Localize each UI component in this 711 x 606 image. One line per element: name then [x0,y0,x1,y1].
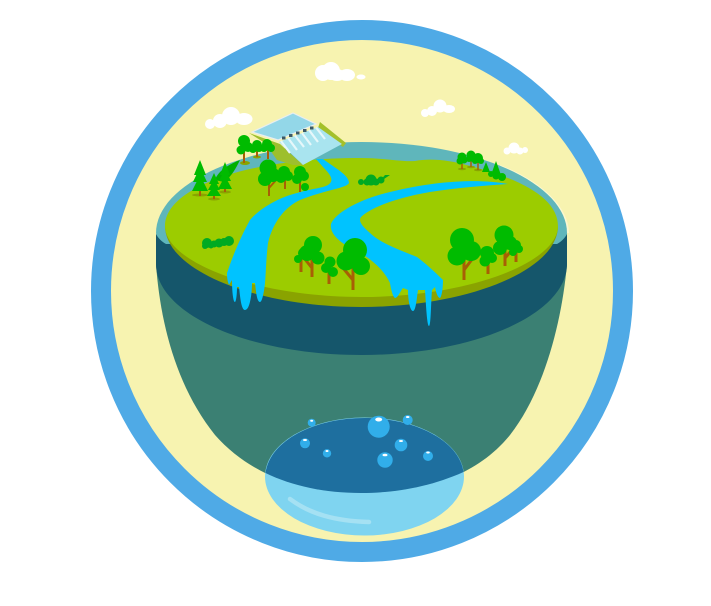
river right [331,181,508,326]
pool highlight [290,499,369,522]
bowl body [156,264,567,493]
right embankment [318,122,346,147]
trees, top right group [456,150,506,181]
bush middle [358,174,390,186]
trees, right group [448,226,523,280]
bubbles [300,415,433,468]
bush left [202,236,234,249]
pine trees left [192,160,240,200]
trees, top group [236,135,275,165]
sluice gates [282,126,314,140]
reservoir surface [252,113,316,140]
river left [227,159,349,310]
trees, centre group [294,236,370,290]
bowl rim back [156,142,567,250]
spillway water [279,127,342,165]
clouds [205,62,528,154]
land surface [165,158,558,297]
dark soil band [156,234,567,355]
hydroelectric dam [249,113,346,165]
rim pale edge [500,166,568,233]
left embankment [249,133,303,165]
water pool [265,418,464,536]
trees, upper middle group [258,160,309,196]
olive land edge [165,226,558,307]
water inside bowl [266,418,464,493]
blue ring background [101,30,623,552]
piers and cascades [281,128,325,153]
